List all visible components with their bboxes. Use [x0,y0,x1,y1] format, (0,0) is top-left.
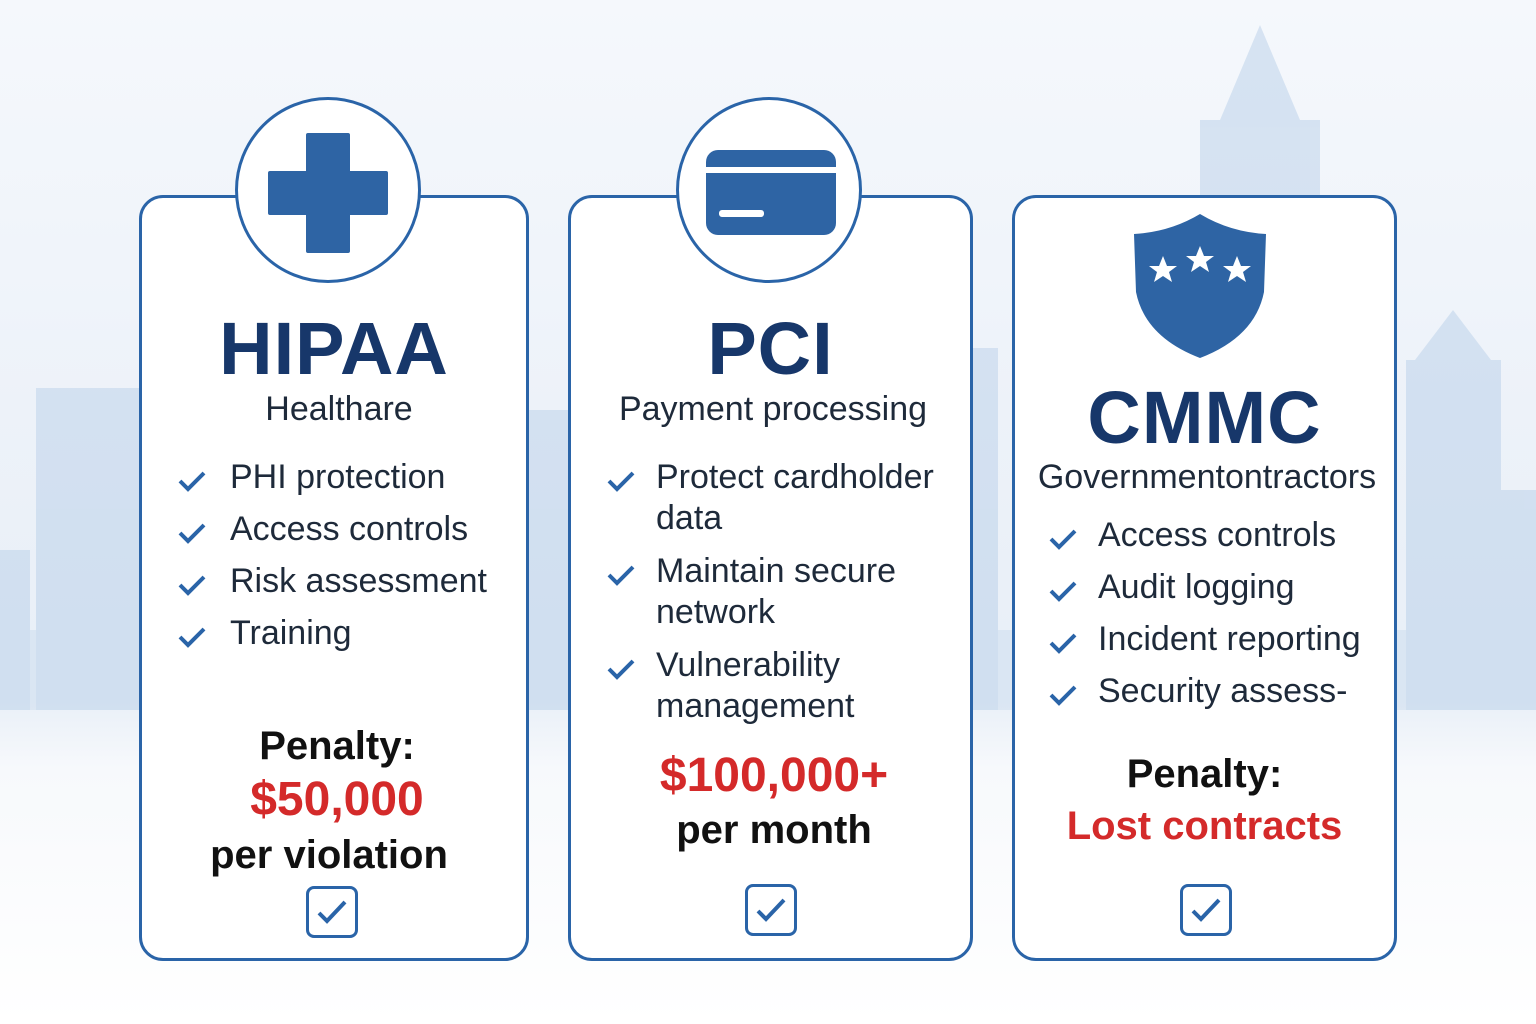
list: PCI requirements: Vulnerability [656,646,840,684]
list: CMMC requirements: Security assess- [1098,672,1347,710]
card: PCI [568,195,973,961]
penalty: HIPAA: Penalty: [259,724,415,768]
penalty: PCI [660,749,888,852]
list: PCI requirements: network [656,593,775,631]
subtitle: Healthare: Healthare [265,390,413,428]
penalty: PCI: per month [676,808,872,852]
penalty: HIPAA: $50,000 [250,773,424,826]
list: PCI requirements: Maintain secure [656,552,896,590]
heading: HIPAA: HIPAA [219,307,449,390]
checkbox icon [745,884,797,936]
penalty: PCI: $100,000+ [660,749,888,802]
card: CMMC [1012,195,1397,961]
heading: CMMC: CMMC [1087,376,1322,459]
list: CMMC requirements [1050,516,1361,710]
list: HIPAA requirements [178,458,487,652]
list: CMMC requirements: Audit logging [1098,568,1295,606]
list: HIPAA requirements: Training [230,614,352,652]
list: CMMC requirements: Access controls [1098,516,1336,554]
list: PCI requirements: Protect cardholder [656,458,934,496]
checkbox icon [1180,884,1232,936]
heading: PCI: PCI [707,307,834,390]
list: HIPAA requirements: PHI protection [230,458,445,496]
list: PCI requirements [608,458,934,725]
list: CMMC requirements: Incident reporting [1098,620,1361,658]
checkbox icon [306,886,358,938]
penalty: CMMC: Lost contracts [1067,804,1342,848]
penalty: CMMC: Penalty: [1127,752,1282,796]
subtitle: Governmentontractors: Governmentontractors [1038,458,1376,496]
subtitle: Payment processing: Payment processing [619,390,927,428]
icon: medical cross [235,97,421,283]
penalty: HIPAA: per violation [210,833,448,877]
list: HIPAA requirements: Risk assessment [230,562,487,600]
card: HIPAA [139,195,529,961]
list: PCI requirements: data [656,499,722,537]
list: HIPAA requirements: Access controls [230,510,468,548]
icon: credit card [676,97,862,283]
list: PCI requirements: management [656,687,854,725]
penalty: HIPAA [210,724,448,877]
penalty: CMMC [1067,752,1342,848]
icon: shield with stars [1134,214,1266,358]
